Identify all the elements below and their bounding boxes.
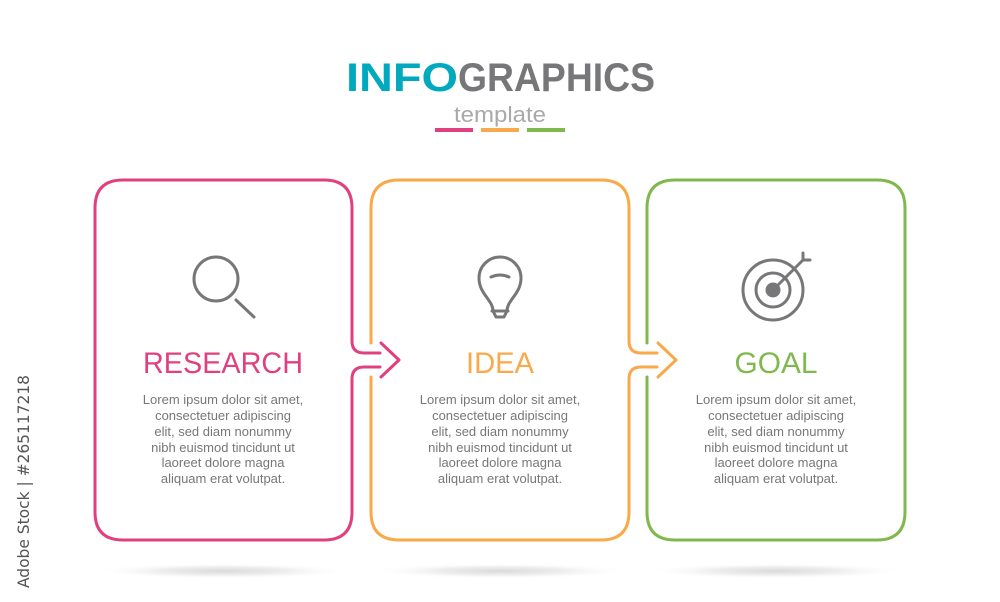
text block: research <box>143 392 303 486</box>
text block: idea: elit, sed diam nonummy <box>431 424 569 439</box>
title <box>346 56 655 100</box>
text block: idea: laoreet dolore magna <box>439 455 562 470</box>
icon: magnifier <box>194 257 254 317</box>
text block: idea: Lorem ipsum dolor sit amet, <box>420 392 580 407</box>
title: GRAPHICS <box>458 56 655 100</box>
text block: research: consectetuer adipiscing <box>155 408 291 423</box>
text block: goal: consectetuer adipiscing <box>708 408 844 423</box>
text block: research: nibh euismod tincidunt ut <box>151 440 295 455</box>
heading: research: RESEARCH <box>143 347 303 380</box>
subtitle: template <box>454 102 546 127</box>
shadows under panels <box>93 563 906 579</box>
text block: idea: aliquam erat volutpat. <box>438 471 562 486</box>
text block: research: Lorem ipsum dolor sit amet, <box>143 392 303 407</box>
text block: research: elit, sed diam nonummy <box>154 424 292 439</box>
title colour bars <box>435 128 565 132</box>
icon: target with dart <box>743 253 810 320</box>
text block: goal: elit, sed diam nonummy <box>707 424 845 439</box>
text block: goal: laoreet dolore magna <box>715 455 838 470</box>
text block: goal: Lorem ipsum dolor sit amet, <box>696 392 856 407</box>
stock id watermark: Adobe Stock | #265117218 <box>14 375 33 588</box>
text block: idea: nibh euismod tincidunt ut <box>428 440 572 455</box>
panel: goal outline <box>647 180 905 540</box>
text block: goal: aliquam erat volutpat. <box>714 471 838 486</box>
text block: idea <box>420 392 580 486</box>
text block: idea: consectetuer adipiscing <box>432 408 568 423</box>
panel: research outline with arrow <box>95 180 399 540</box>
text block: research: laoreet dolore magna <box>162 455 285 470</box>
text block: goal: nibh euismod tincidunt ut <box>704 440 848 455</box>
title: INFO <box>346 56 458 100</box>
panel: idea outline with arrow <box>371 180 676 540</box>
text block: goal <box>696 392 856 486</box>
heading: idea: IDEA <box>466 347 534 380</box>
text block: research: aliquam erat volutpat. <box>161 471 285 486</box>
heading: goal: GOAL <box>734 347 818 380</box>
icon: light bulb <box>479 257 521 317</box>
